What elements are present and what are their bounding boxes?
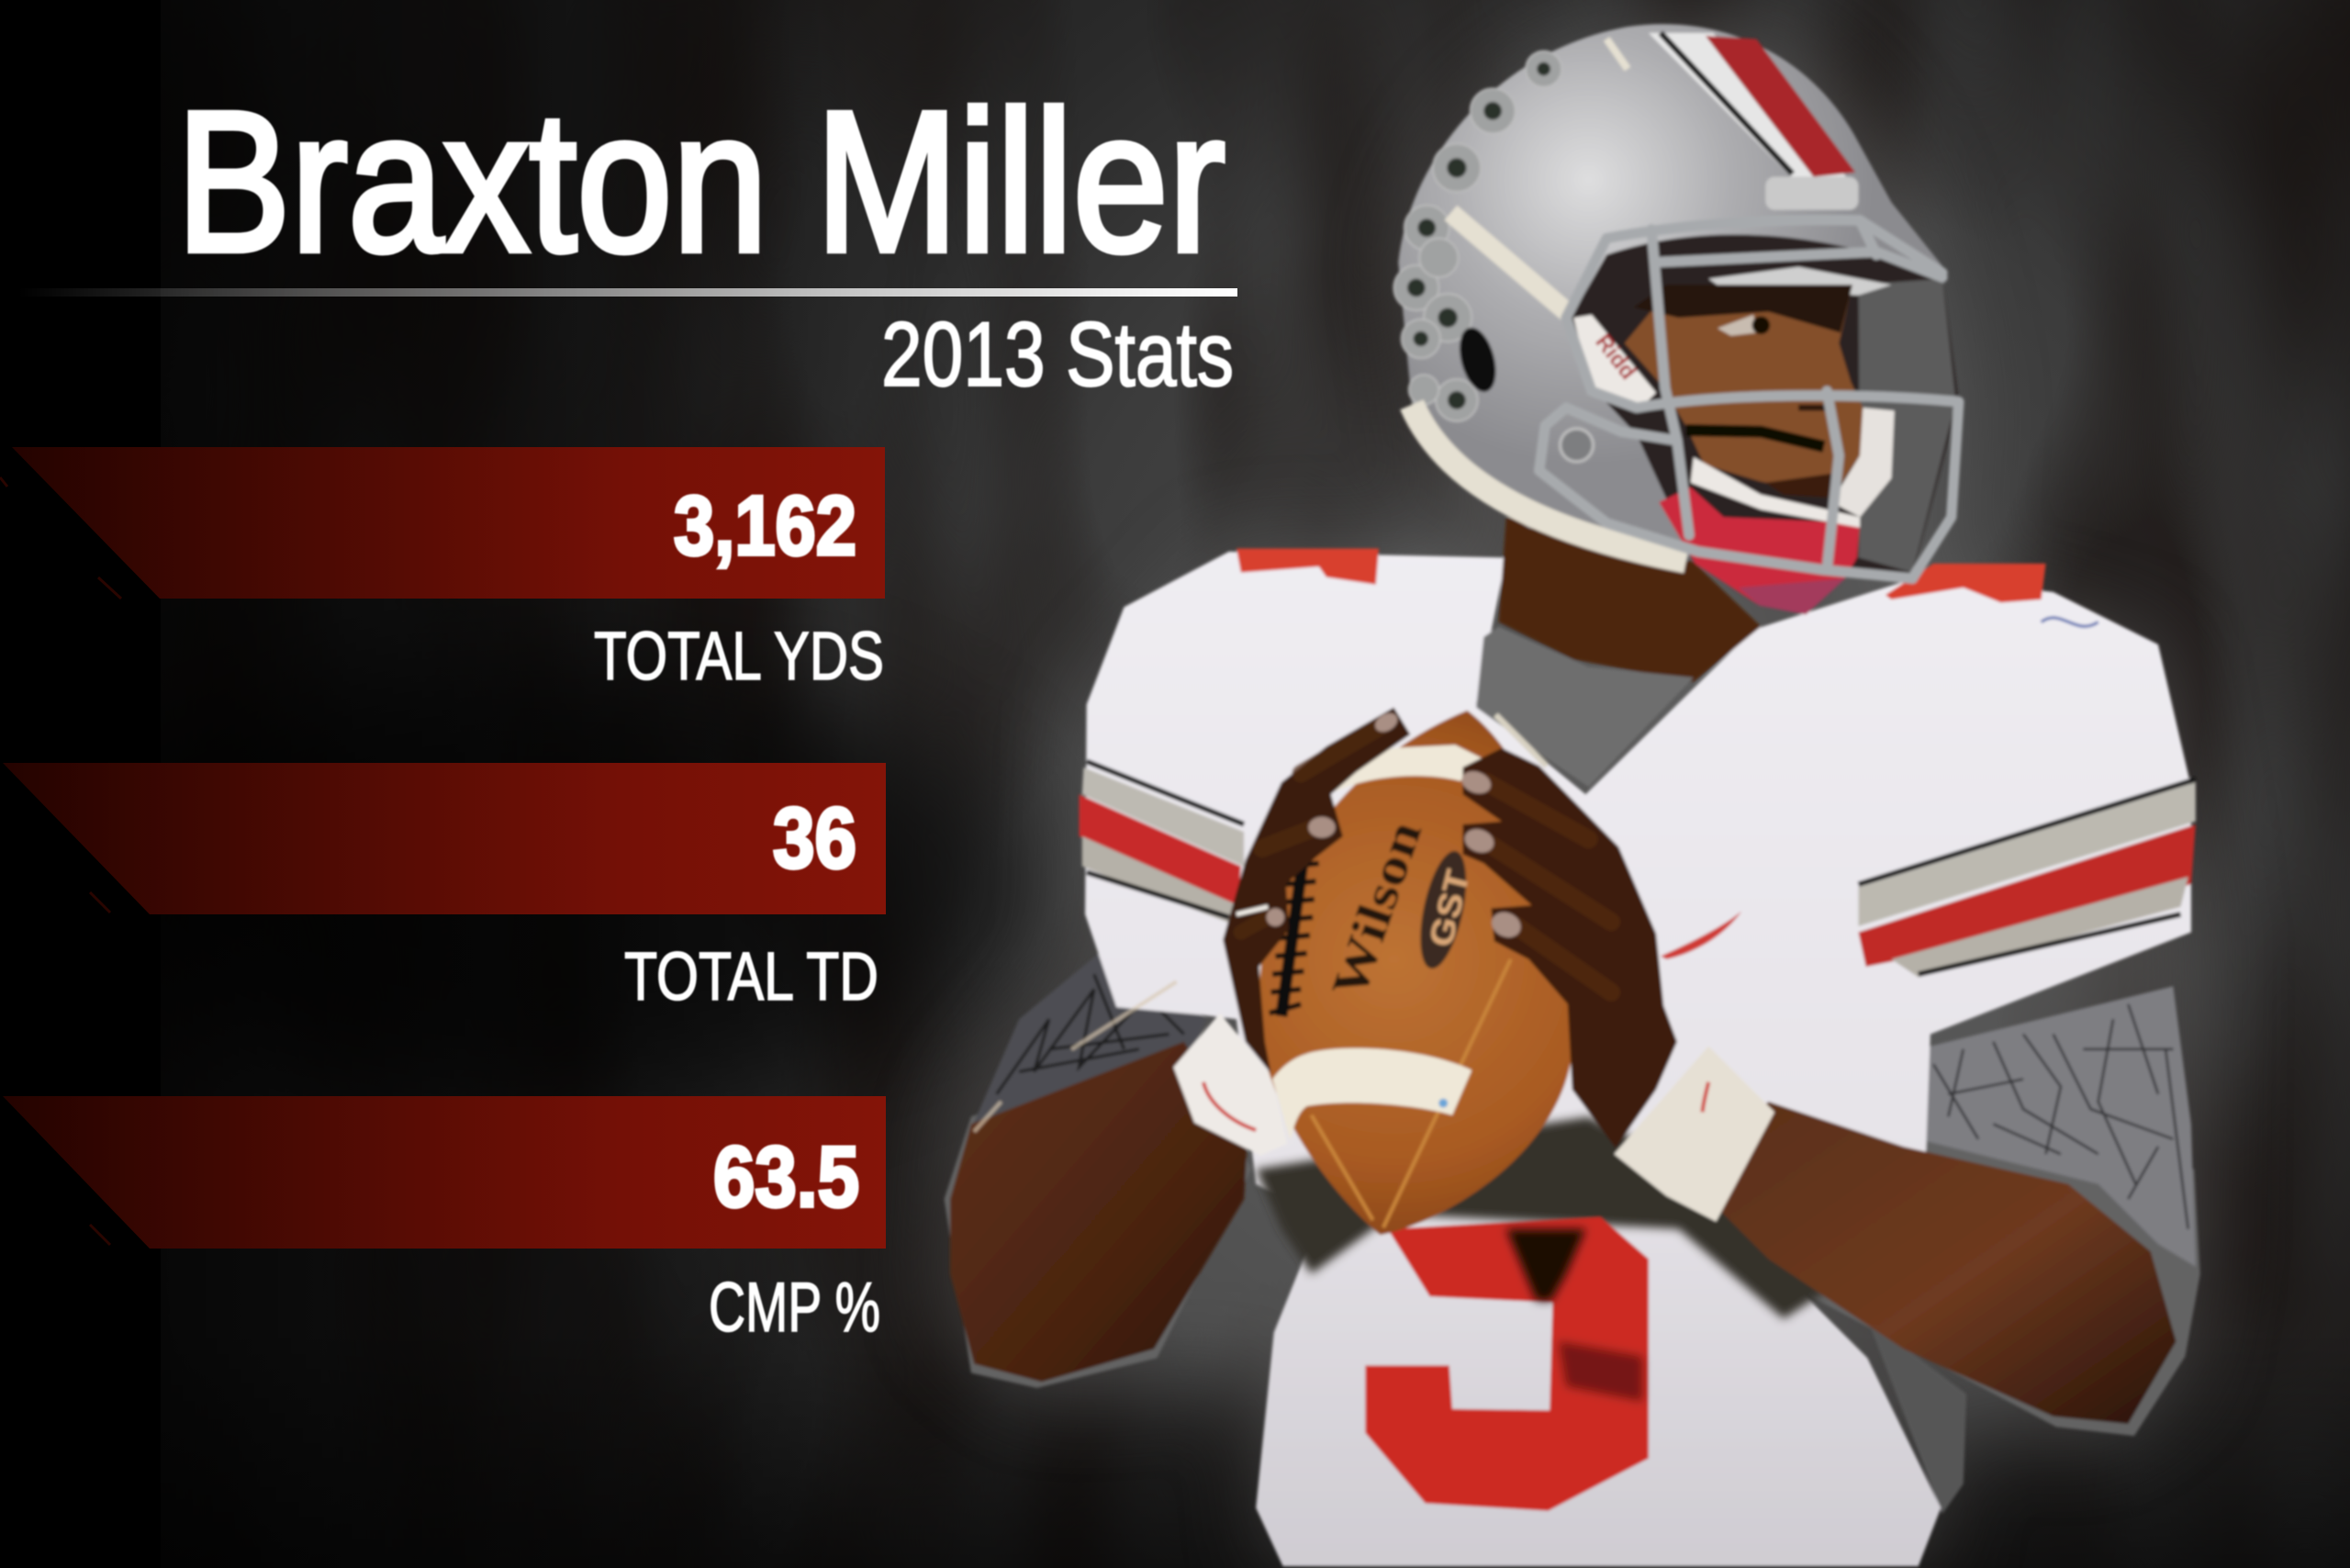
collar tape bbox=[1495, 715, 1547, 766]
helmet bbox=[1393, 24, 1959, 614]
ball GST badge: GST bbox=[1421, 866, 1477, 950]
left nails bbox=[1267, 710, 1401, 926]
right forearm bbox=[1708, 1102, 2177, 1424]
left palm and fingers bbox=[1223, 708, 1410, 1073]
right sleeve stripes bbox=[1858, 779, 2196, 977]
autograph mark bbox=[2042, 618, 2098, 626]
stat: completion percentage bbox=[3, 1096, 886, 1347]
helmet brand Riddell: Ridd bbox=[1590, 330, 1640, 385]
mask shadow on face bbox=[1686, 431, 1824, 447]
label total td: TOTAL TD bbox=[624, 938, 878, 1014]
value 36: 36 bbox=[773, 790, 856, 886]
decorative bar fragments bbox=[0, 477, 121, 1245]
white pad bbox=[1831, 408, 1895, 517]
ball GST badge bbox=[1412, 847, 1477, 972]
chin strap bbox=[1659, 487, 1860, 614]
eye bbox=[1718, 315, 1756, 336]
facemask bars bbox=[1539, 220, 1959, 578]
left riddell strip bbox=[1573, 315, 1656, 408]
left sleeve stripes bbox=[1080, 761, 1244, 926]
big ten badge bbox=[1765, 177, 1858, 210]
mouth bbox=[1765, 474, 1831, 498]
right compression sleeve bbox=[1919, 986, 2196, 1267]
brow padding bbox=[1708, 267, 1891, 296]
undershirt collar bbox=[1476, 626, 1694, 787]
inside helmet shadow bbox=[1571, 234, 1959, 576]
right hand bbox=[1459, 748, 1677, 1148]
ball repair mark bbox=[1438, 1099, 1448, 1108]
jersey bbox=[1085, 552, 2191, 1566]
helmet hardware bbox=[1561, 429, 1594, 462]
ribbon bar 3 bbox=[3, 1096, 886, 1249]
ribbon bar 1 bbox=[12, 447, 885, 599]
glow behind player bbox=[945, 21, 2203, 1568]
stat: total touchdowns bbox=[3, 763, 886, 1014]
left forearm bbox=[950, 1042, 1247, 1382]
ear hole bbox=[1453, 323, 1502, 396]
ball top stripe bbox=[1336, 745, 1497, 791]
ribbon bar 2 bbox=[3, 763, 886, 914]
wristband swooshes bbox=[1203, 1082, 1708, 1130]
right nails bbox=[1459, 767, 1525, 942]
right palm and fingers bbox=[1462, 748, 1677, 1148]
jersey swoosh bbox=[1661, 912, 1741, 959]
visor right side bbox=[1858, 279, 1956, 573]
football bbox=[1259, 711, 1576, 1235]
thin outline around arms bbox=[945, 1035, 2200, 1436]
ball brand: Wilson bbox=[1321, 814, 1432, 1005]
shoulder numbers bbox=[1237, 549, 2046, 602]
left wristband bbox=[1173, 1014, 1287, 1156]
helmet shell bbox=[1398, 24, 1945, 562]
neck bbox=[1499, 517, 1761, 682]
jersey chest numeral bbox=[1365, 1217, 1649, 1511]
face bbox=[1625, 291, 1863, 496]
label cmp percent: CMP % bbox=[709, 1269, 880, 1347]
title: player name: Braxton Miller bbox=[176, 71, 1225, 294]
buckeye stickers bbox=[1393, 51, 1561, 421]
left compression sleeve bbox=[967, 947, 1206, 1139]
lower side panel shadow bbox=[1867, 1319, 1966, 1514]
helmet cream trim bbox=[1412, 39, 1686, 561]
value 63.5: 63.5 bbox=[713, 1128, 859, 1225]
ball body bbox=[1259, 711, 1576, 1235]
right finger highlights bbox=[1487, 782, 1611, 992]
player photo illustration bbox=[945, 21, 2203, 1568]
helmet centre stripe bbox=[1649, 33, 1855, 177]
player figure bbox=[945, 24, 2200, 1566]
stat: total yards bbox=[12, 447, 885, 694]
belly shadow bbox=[1256, 1116, 1826, 1319]
hair shadow bbox=[1634, 285, 1852, 332]
nose shadow bbox=[1798, 406, 1831, 409]
value 3,162: 3,162 bbox=[674, 479, 856, 573]
numeral shadows bbox=[1506, 1229, 1642, 1402]
ball laces bbox=[1270, 853, 1319, 1016]
left finger highlights bbox=[1241, 725, 1382, 933]
ball bottom stripe bbox=[1272, 1048, 1472, 1140]
left hand bbox=[1223, 708, 1410, 1073]
subtitle: 2013 Stats bbox=[881, 303, 1234, 405]
right wristband bbox=[1614, 1047, 1774, 1222]
ball seams bbox=[1312, 959, 1511, 1227]
title rule bbox=[18, 288, 1237, 297]
label total yds: TOTAL YDS bbox=[594, 618, 884, 694]
